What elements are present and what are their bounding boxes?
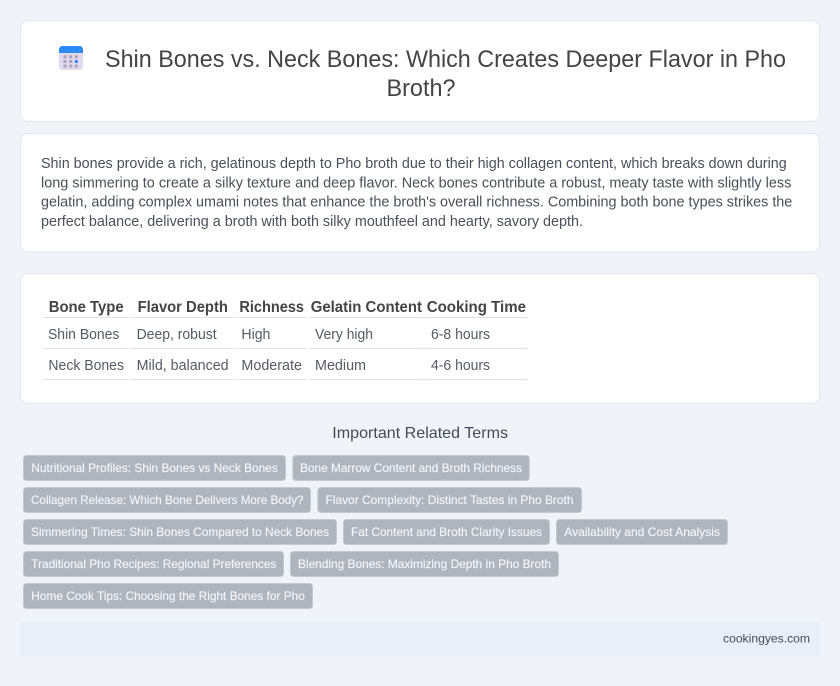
summary text: gelatin, adding complex umami notes that enhance the broth's overall richness. Combining both bone types strikes the (41, 195, 792, 211)
table row: shin bones: Shin Bones (48, 327, 119, 343)
panel: title card (20, 20, 820, 122)
title: Broth? (386, 75, 456, 102)
table row: neck bones: Moderate (241, 358, 302, 374)
tag: flavor complexity: Flavor Complexity: Distinct Tastes in Pho Broth (326, 493, 574, 507)
tag: fat content (344, 520, 550, 544)
summary text: perfect balance, delivering a broth with both silky mouthfeel and hearty, savory depth. (41, 214, 583, 230)
table row: neck bones: Neck Bones (48, 358, 124, 374)
footer (20, 622, 820, 656)
tag: bone marrow (293, 456, 529, 480)
table row: shin bones: Very high (315, 327, 373, 343)
footer source text: cookingyes.com (723, 632, 810, 646)
table row: neck bones: 4-6 hours (431, 358, 490, 374)
table row: neck bones (48, 358, 490, 374)
tag: home cook tips: Home Cook Tips: Choosing the Right Bones for Pho (31, 589, 305, 603)
title (105, 46, 786, 102)
tag: simmering times (24, 520, 336, 544)
table header row: Richness (239, 299, 304, 316)
tag: blending bones (290, 552, 558, 576)
tag: collagen release: Collagen Release: Which Bone Delivers More Body? (31, 493, 304, 507)
icon: calendar (59, 46, 83, 70)
table header row (49, 299, 526, 316)
tag: nutritional profiles: Nutritional Profiles: Shin Bones vs Neck Bones (31, 461, 278, 475)
summary text (41, 156, 792, 230)
panel: summary paragraph (20, 134, 820, 252)
tag: traditional recipes: Traditional Pho Recipes: Regional Preferences (31, 557, 276, 571)
table header row: Cooking Time (427, 299, 526, 316)
heading: related terms: Important Related Terms (332, 425, 508, 442)
table row: neck bones: Medium (315, 358, 366, 374)
table row: shin bones: Deep, robust (137, 327, 217, 343)
table header row: Gelatin Content (311, 299, 422, 316)
table header row: Flavor Depth (138, 299, 228, 316)
tag: availability: Availability and Cost Analysis (564, 525, 720, 539)
tag: fat content: Fat Content and Broth Clarity Issues (351, 525, 542, 539)
table header row: Bone Type (49, 299, 124, 316)
panel: related term tags (24, 456, 728, 608)
tag: traditional recipes (24, 552, 284, 576)
summary text: Shin bones provide a rich, gelatinous depth to Pho broth due to their high collagen content, which breaks down during (41, 156, 787, 172)
tag: bone marrow: Bone Marrow Content and Broth Richness (300, 461, 522, 475)
title: Shin Bones vs. Neck Bones: Which Creates Deeper Flavor in Pho (105, 46, 786, 73)
panel: comparison table (20, 274, 820, 404)
tag: flavor complexity (318, 488, 582, 512)
tag: availability (556, 520, 728, 544)
tag: blending bones: Blending Bones: Maximizing Depth in Pho Broth (298, 557, 551, 571)
tag: home cook tips (24, 584, 312, 608)
table row: neck bones: Mild, balanced (137, 358, 229, 374)
tag: nutritional profiles (24, 456, 286, 480)
table row: shin bones (48, 327, 490, 343)
tag: simmering times: Simmering Times: Shin Bones Compared to Neck Bones (31, 525, 329, 539)
table row: shin bones: High (241, 327, 270, 343)
tag: collagen release (24, 488, 310, 512)
summary text: long simmering to create a silky texture and deep flavor. Neck bones contribute a robust, meaty taste with slightly less (41, 175, 791, 191)
table row: shin bones: 6-8 hours (431, 327, 490, 343)
